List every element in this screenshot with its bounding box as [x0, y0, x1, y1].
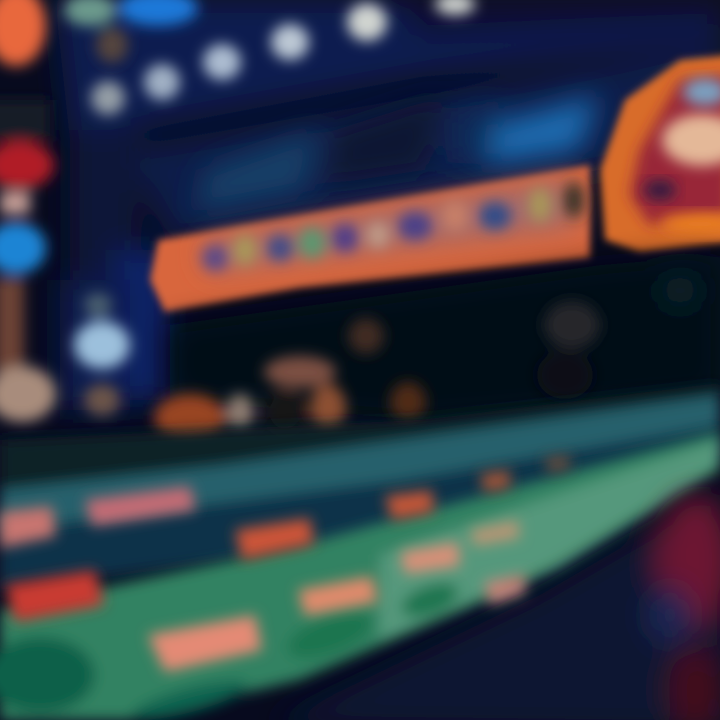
white figure [74, 293, 130, 416]
foreground dark edge [270, 490, 720, 720]
right orange sign [600, 55, 720, 252]
green table surface [0, 432, 720, 720]
top left colour blobs [0, 0, 198, 66]
ceiling band [55, 0, 720, 410]
ceiling lights [91, 0, 475, 115]
orange sign [150, 165, 590, 312]
left column [0, 100, 56, 422]
dark middle area [170, 255, 720, 420]
salmon chips [0, 456, 570, 672]
seated figures [154, 301, 600, 442]
upper windows [195, 95, 600, 212]
table rail [0, 385, 720, 590]
